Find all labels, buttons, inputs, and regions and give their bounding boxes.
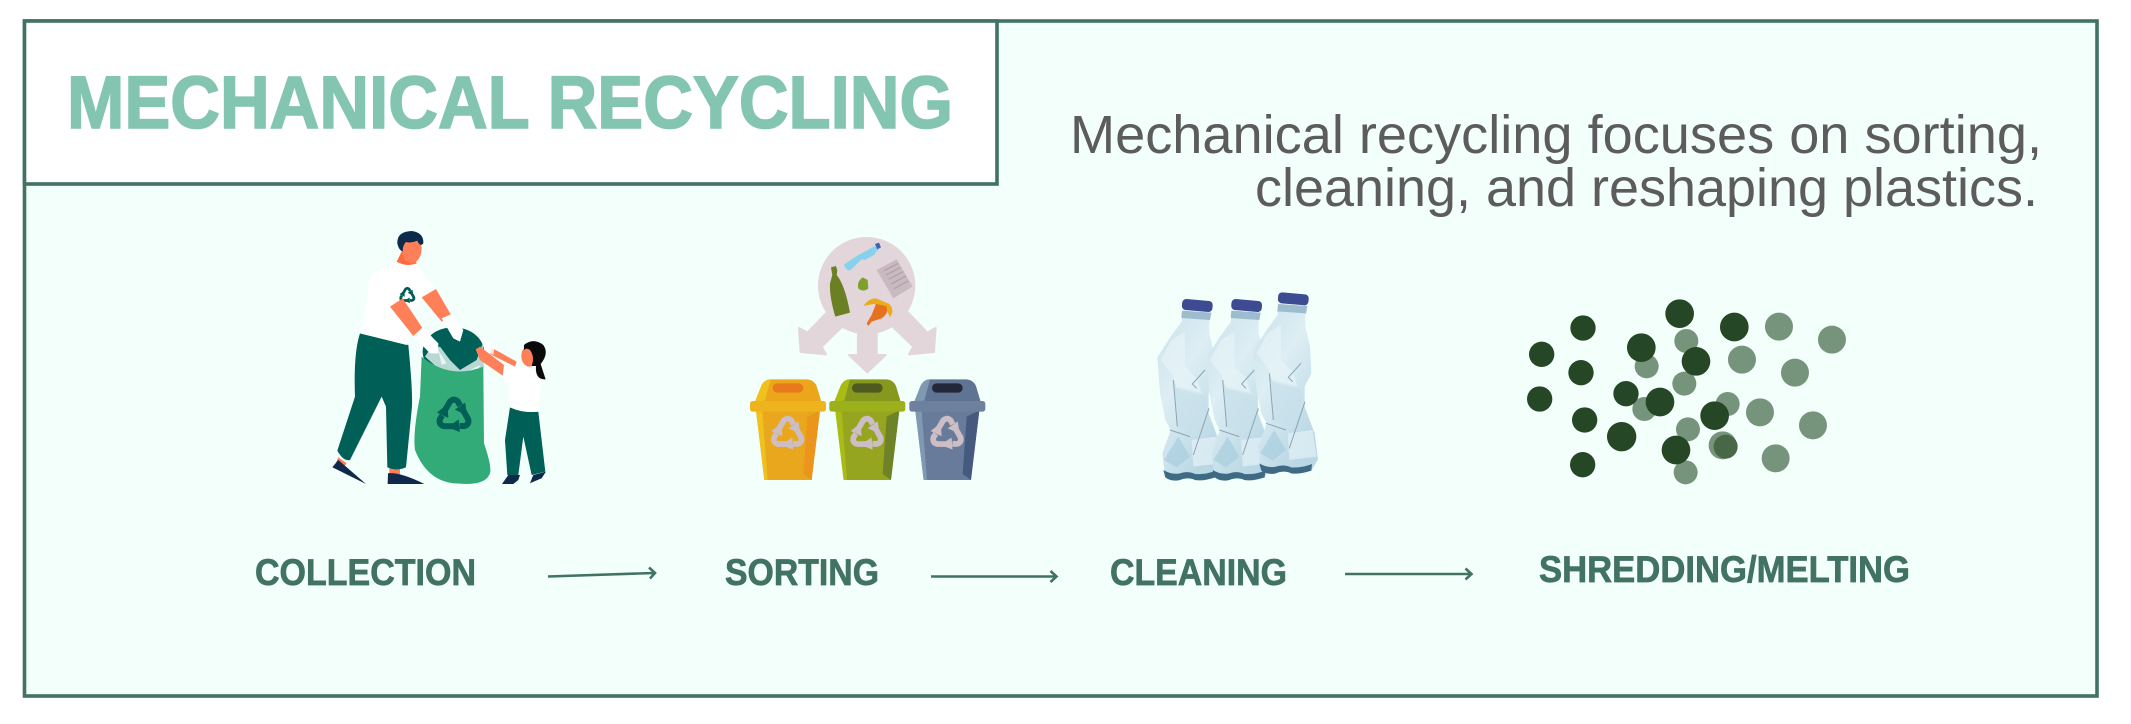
step label: sorting: SORTING — [725, 552, 879, 593]
title: MECHANICAL RECYCLING — [67, 61, 953, 144]
description text — [1070, 105, 2042, 218]
step label: collection: COLLECTION — [255, 552, 476, 593]
child — [476, 336, 546, 484]
title box — [24, 21, 997, 184]
icon: plastic pellets — [1527, 299, 1846, 484]
icon: green bin — [829, 379, 905, 480]
step label: cleaning: CLEANING — [1110, 552, 1287, 593]
icon: blue bin — [909, 379, 985, 480]
icon: man and child filling a recycling bag — [332, 231, 546, 484]
description text: Mechanical recycling focuses on sorting, — [1070, 105, 2042, 165]
arrow: cleaning to shredding — [1345, 568, 1472, 580]
icon: waste circle and three arrows — [799, 238, 936, 372]
description text: cleaning, and reshaping plastics. — [1255, 158, 2038, 218]
icon: yellow bin — [750, 379, 826, 480]
icon: sorting waste into three bins — [750, 238, 985, 480]
step label: shredding and melting: SHREDDING/MELTING — [1539, 549, 1910, 590]
icon: crushed plastic bottles — [1157, 292, 1318, 481]
arrow: collection to sorting — [548, 568, 655, 578]
arrow: sorting to cleaning — [931, 571, 1056, 582]
